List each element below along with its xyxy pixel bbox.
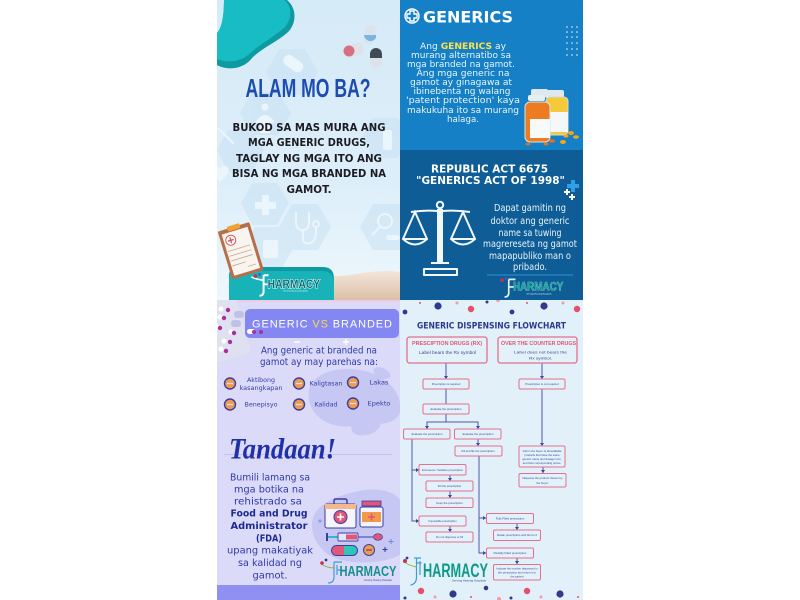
flowchart steps: Inform the buyer of all available: [523, 449, 562, 453]
reminder text: Administrator: [230, 521, 308, 532]
lavender blob: [312, 490, 405, 562]
reminder text: upang makatiyak: [227, 546, 313, 556]
minus and plus marks: [294, 339, 349, 345]
icon: sparkle crosses: [564, 180, 579, 200]
benefit labels: [240, 377, 391, 408]
flowchart steps: the buyer.: [536, 481, 549, 485]
act description: doktor ang generic: [490, 216, 570, 227]
act description: [483, 203, 577, 273]
box: prescription drugs: [407, 337, 487, 363]
heading: "GENERICS ACT OF 1998": [416, 174, 565, 187]
box: over the counter drugs: [498, 337, 577, 363]
flowchart connectors: [412, 363, 545, 564]
background medical icons: [211, 53, 400, 258]
box: over the counter drugs: OVER THE COUNTER DRUGS: [501, 341, 577, 347]
flowchart steps: Prescription is required: [432, 382, 461, 386]
icon: clipboard: [217, 220, 264, 280]
generics description: ibinebenta ng walang: [414, 86, 510, 97]
logo: pharmacy: Serving Hearing Hospitals: [526, 292, 552, 295]
generics description: Ang GENERICS ay: [420, 41, 507, 52]
teal box: [229, 267, 334, 300]
generics description: halaga.: [447, 114, 479, 125]
heading: REPUBLIC ACT 6675: [431, 162, 548, 176]
generics description: makukuha ito sa murang: [407, 105, 519, 116]
flowchart steps: Fill and file the prescription: [461, 449, 495, 453]
bottom band: [217, 585, 400, 600]
generics description: 'patent protection' kaya: [406, 95, 520, 106]
logo: pharmacy: [251, 273, 320, 296]
heading: GENERIC DISPENSING FLOWCHART: [417, 322, 566, 332]
lavender blob: [309, 365, 400, 439]
benefit labels: Aktibong: [247, 377, 275, 384]
flowchart steps: Do not dispense or fill: [436, 535, 463, 539]
benefit labels: Kaligtasan: [310, 380, 343, 388]
flowchart steps: Dispense the product chosen by: [523, 476, 563, 480]
logo: pharmacy: HARMACY: [268, 277, 320, 291]
intro text: gamot ay may parehas na:: [260, 357, 378, 368]
logo: pharmacy: [403, 557, 488, 585]
heading: GENERICS: [423, 8, 513, 26]
flowchart steps: Impossible prescription: [428, 519, 457, 523]
reminder text: mga botika na: [234, 484, 304, 496]
act description: pribado.: [513, 262, 547, 273]
act description: magrereseta ng gamot: [483, 239, 577, 250]
reminder text: [227, 472, 313, 582]
dot grid: [566, 26, 578, 56]
reminder text: (FDA): [256, 534, 282, 544]
generics description: Ang mga generic na: [416, 68, 510, 79]
flowchart steps: Fill the prescription: [438, 484, 462, 488]
reminder text: rehistrado sa: [234, 496, 302, 508]
box: prescription drugs: Label bears the Rx symbol: [419, 350, 476, 355]
icon: capsules: [344, 24, 382, 68]
background hexagons: [217, 49, 412, 268]
reminder text: Bumili lamang sa: [230, 472, 310, 484]
statement text: GAMOT.: [286, 183, 332, 196]
box: over the counter drugs: Label does not bears the: [514, 350, 568, 354]
heading banner: GENERIC VS BRANDED: [252, 318, 392, 330]
panel: alam mo ba: [211, 0, 412, 300]
infographic: [217, 0, 583, 600]
logo: pharmacy: HARMACY: [513, 280, 563, 293]
statement text: BISA NG MGA BRANDED NA: [232, 167, 386, 180]
logo: pharmacy: Serving Hearing Hospitals: [283, 290, 308, 293]
flowchart steps: generic name and dosage form,: [522, 457, 562, 461]
intro text: Ang generic at branded na: [261, 346, 377, 356]
act description: name sa tuwing: [498, 228, 562, 239]
flowchart steps: and their corresponding prices.: [523, 461, 561, 465]
panel: generic vs branded: [217, 300, 400, 600]
heading banner: [245, 309, 399, 338]
flowchart steps: [404, 379, 566, 580]
logo: pharmacy: HARMACY: [340, 563, 396, 580]
icon: medicine jar: [360, 501, 383, 527]
flowchart steps: Keep the prescription: [436, 501, 463, 505]
flowchart steps: Evaluate the prescription: [412, 432, 443, 436]
flowchart steps: the prescription and return it to: [498, 570, 536, 574]
teal blob: [217, 0, 294, 68]
flowchart steps: Fully Filled prescription: [496, 516, 525, 520]
statement text: BUKOD SA MAS MURA ANG: [232, 121, 386, 134]
flowchart steps: Indicate the number dispensed in: [496, 566, 538, 570]
flowchart steps: Prescription is not required: [525, 382, 559, 386]
box: over the counter drugs: Rx symbol.: [529, 356, 552, 360]
icon: first aid kit: [325, 499, 356, 528]
statement text: [232, 121, 386, 196]
flowchart steps: the patient: [510, 574, 524, 578]
flowchart steps: Partially Filled prescription: [494, 551, 527, 555]
benefit labels: Epekto: [368, 400, 391, 408]
flowchart steps: Retain prescription until fits for 2: [497, 533, 537, 537]
flowchart steps: products that have the same: [524, 453, 560, 457]
logo: pharmacy: HARMACY: [423, 561, 488, 582]
benefit labels: kasangkapan: [240, 385, 283, 392]
title: ALAM MO BA?: [246, 73, 370, 103]
logo: pharmacy: Serving Hearing Hospitals: [452, 578, 486, 582]
statement text: MGA GENERIC DRUGS,: [248, 136, 370, 149]
benefit labels: Lakas: [370, 380, 388, 386]
icons: pill badges: [224, 377, 358, 410]
panel: generics: [400, 0, 583, 150]
icon: cross badge: [405, 9, 419, 23]
panel: flowchart: [400, 298, 583, 600]
statement text: TAGLAY NG MGA ITO ANG: [236, 152, 382, 165]
flowchart steps: Evaluate the prescription: [431, 407, 462, 411]
reminder text: sa kalidad ng: [238, 558, 302, 569]
flowchart steps: Erroneous / Violative prescription: [422, 468, 463, 472]
beige blanket: [334, 271, 400, 300]
icon: medicine bottles: [525, 89, 579, 146]
box: prescription drugs: PRESCIPTION DRUGS (RX): [412, 341, 482, 347]
intro text: [260, 346, 378, 368]
script heading: Tandaan!: [229, 432, 336, 466]
logo: pharmacy: Serving Hearing Hospitals: [364, 579, 393, 582]
benefit labels: Kalidad: [314, 402, 338, 408]
generics description: gamot ay ginagawa at: [410, 77, 512, 88]
logo: pharmacy: [500, 277, 563, 297]
benefit labels: Benepisyo: [244, 402, 278, 408]
icon: syringe: [326, 533, 382, 541]
generics description: mga branded na gamot.: [407, 59, 515, 70]
decorative dots: [403, 298, 580, 600]
icon: blister pack: [217, 300, 250, 362]
act description: Dapat gamitin ng: [494, 203, 566, 214]
icon: capsule and tablet: [318, 519, 394, 556]
flowchart steps: Evaluate the prescription: [463, 432, 494, 436]
generics description: [406, 41, 520, 125]
icon: scales of justice: [403, 202, 475, 275]
reminder text: Food and Drug: [230, 508, 308, 520]
heading: [416, 162, 565, 187]
act description: mapapubliko man o: [489, 251, 571, 262]
logo: pharmacy: [320, 559, 396, 583]
generics description: murang alternatibo sa: [411, 50, 511, 61]
reminder text: gamot.: [252, 570, 288, 582]
panel: republic act: [400, 150, 583, 300]
